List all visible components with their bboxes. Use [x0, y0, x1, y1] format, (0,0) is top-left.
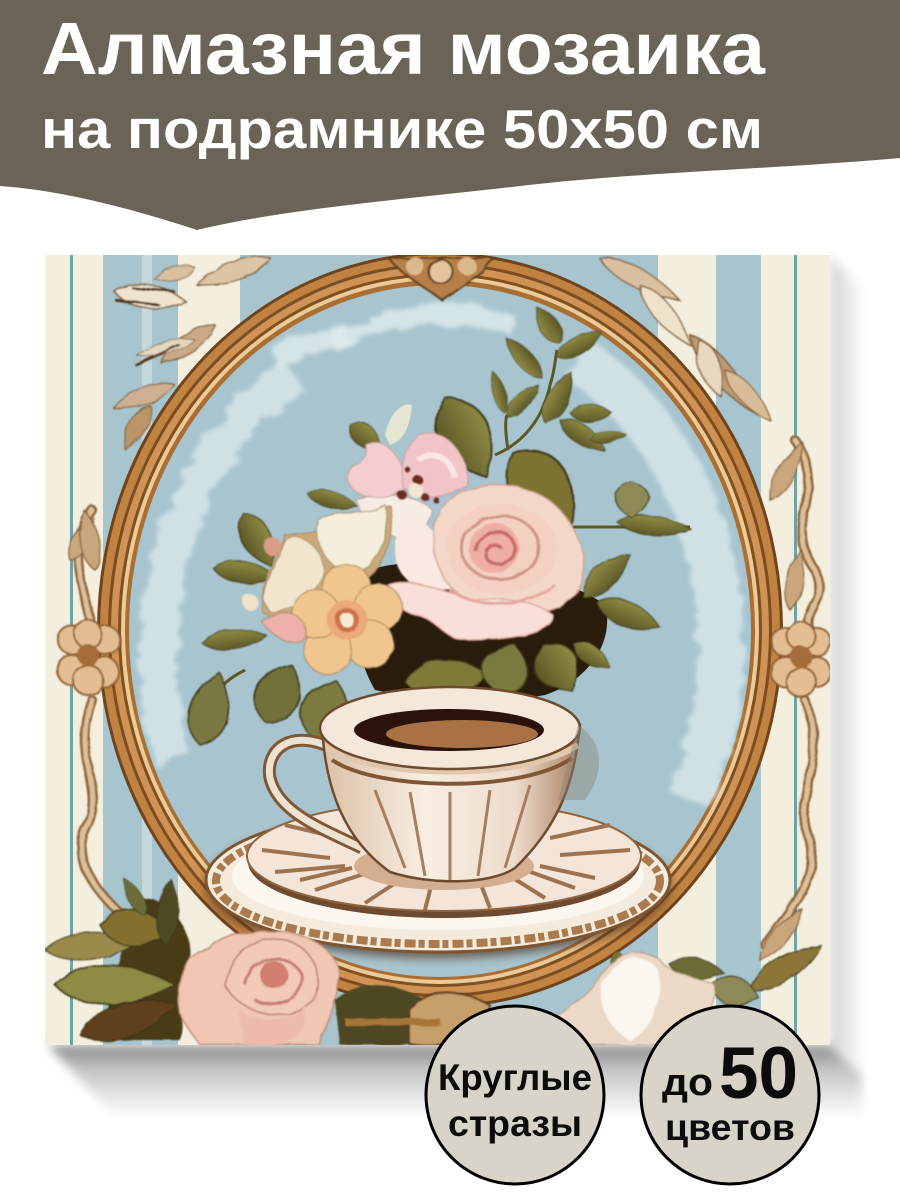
oval frame: [97, 252, 783, 1008]
title: Алмазная мозаика: [41, 7, 766, 90]
striped wallpaper: [45, 255, 830, 1045]
top-right foliage: [595, 250, 777, 427]
plate: [206, 808, 670, 958]
badge: up to 50 colours: 50: [719, 1033, 798, 1114]
subtitle: на подрамнике 50х50 см: [41, 98, 763, 160]
top crest: [388, 257, 494, 300]
bouquet stems: [224, 350, 690, 686]
cup: [269, 687, 599, 881]
pink blossom: [347, 433, 468, 538]
badge: round rhinestones: [426, 1006, 604, 1184]
bottom-right flower and foliage: [557, 935, 828, 1045]
header banner: [0, 0, 900, 230]
badge: round rhinestones: стразы: [448, 1103, 582, 1144]
bottom centre foliage and gilt: [335, 985, 490, 1045]
main rose: [388, 485, 584, 640]
bottom-left rose: [178, 932, 339, 1045]
cream blossoms: [242, 505, 402, 674]
bouquet dark mass: [357, 562, 607, 700]
pale bud behind blossom: [385, 404, 412, 445]
painting: [44, 249, 831, 1051]
badge: up to 50 colours: [641, 1006, 819, 1184]
side scrolls: [78, 440, 819, 945]
top-left foliage: [110, 249, 273, 453]
saucer: [247, 801, 641, 918]
badge: up to 50 colours: до: [662, 1062, 713, 1104]
oval background: [129, 285, 751, 977]
side flowers on frame: [57, 620, 831, 697]
side scroll leaves: [63, 439, 810, 965]
canvas shadow: [48, 255, 866, 1118]
bottom-left foliage: [44, 875, 191, 1051]
badge: up to 50 colours: цветов: [665, 1107, 795, 1148]
badge: round rhinestones: Круглые: [438, 1057, 592, 1098]
bouquet leaves: [181, 303, 693, 750]
